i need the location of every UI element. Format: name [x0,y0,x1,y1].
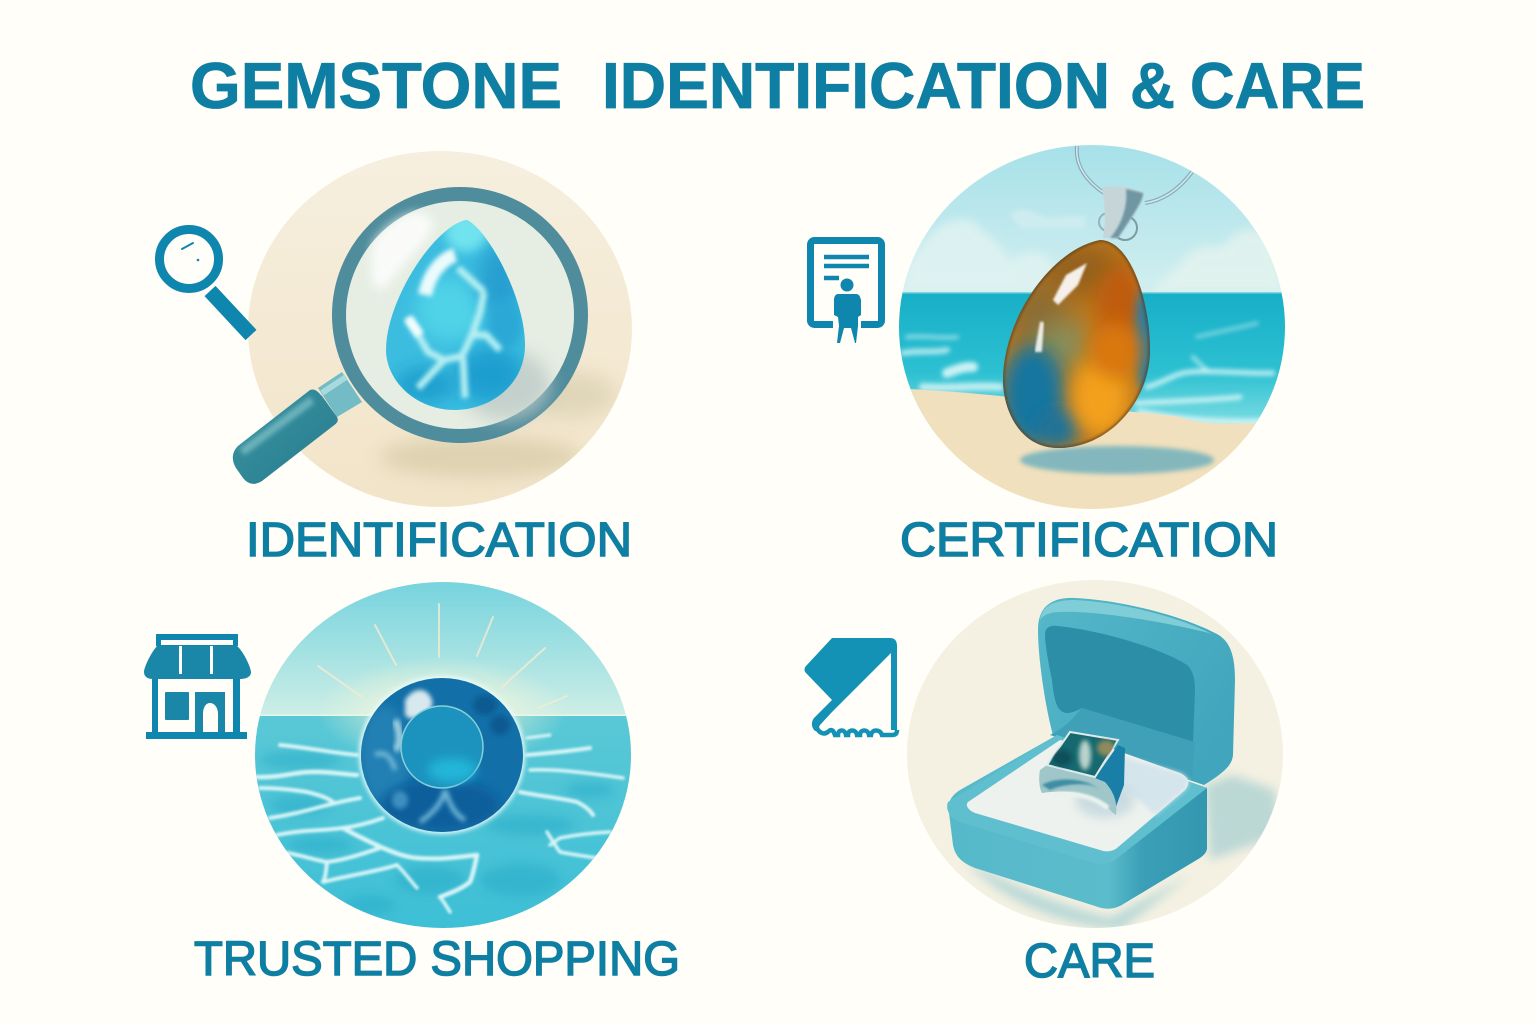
icon: care tag [804,638,897,735]
illustration: blue teardrop gem [386,212,525,410]
illustration: pendant necklace chain and bail [1077,146,1192,240]
illustration: ocean scene circle [250,580,640,931]
illustration: magnifying lens [339,194,581,436]
title: CARE [1190,49,1365,122]
label: care: CARE [1024,935,1155,988]
panel: care [804,580,1283,930]
illustration: ring box lid [1038,598,1235,785]
illustration: amber and blue gemstone [1001,240,1160,448]
illustration: ring with square stone [1039,732,1135,818]
illustration: magnifying glass handle [233,372,362,484]
illustration: cream circle [907,580,1283,930]
illustration: round blue gemstone [359,676,525,834]
label: certification: CERTIFICATION [900,514,1278,567]
label: identification: IDENTIFICATION [246,514,632,567]
title [190,49,1365,122]
panel: identification [160,151,632,507]
icon: certificate with person [810,240,882,343]
title: & [1130,49,1175,122]
icon: storefront [144,634,251,739]
title: GEMSTONE [190,49,562,122]
illustration: gemstone table facet [401,706,483,788]
illustration: beach scene circle [890,140,1290,515]
title: IDENTIFICATION [602,49,1110,122]
panel: trusted shopping [144,580,640,931]
icon: small magnifying glass [160,230,251,335]
illustration: sand-coloured circle [248,151,632,507]
panel: certification [810,140,1290,515]
label: trusted shopping: TRUSTED SHOPPING [194,933,680,986]
illustration: ring box base [947,735,1207,909]
